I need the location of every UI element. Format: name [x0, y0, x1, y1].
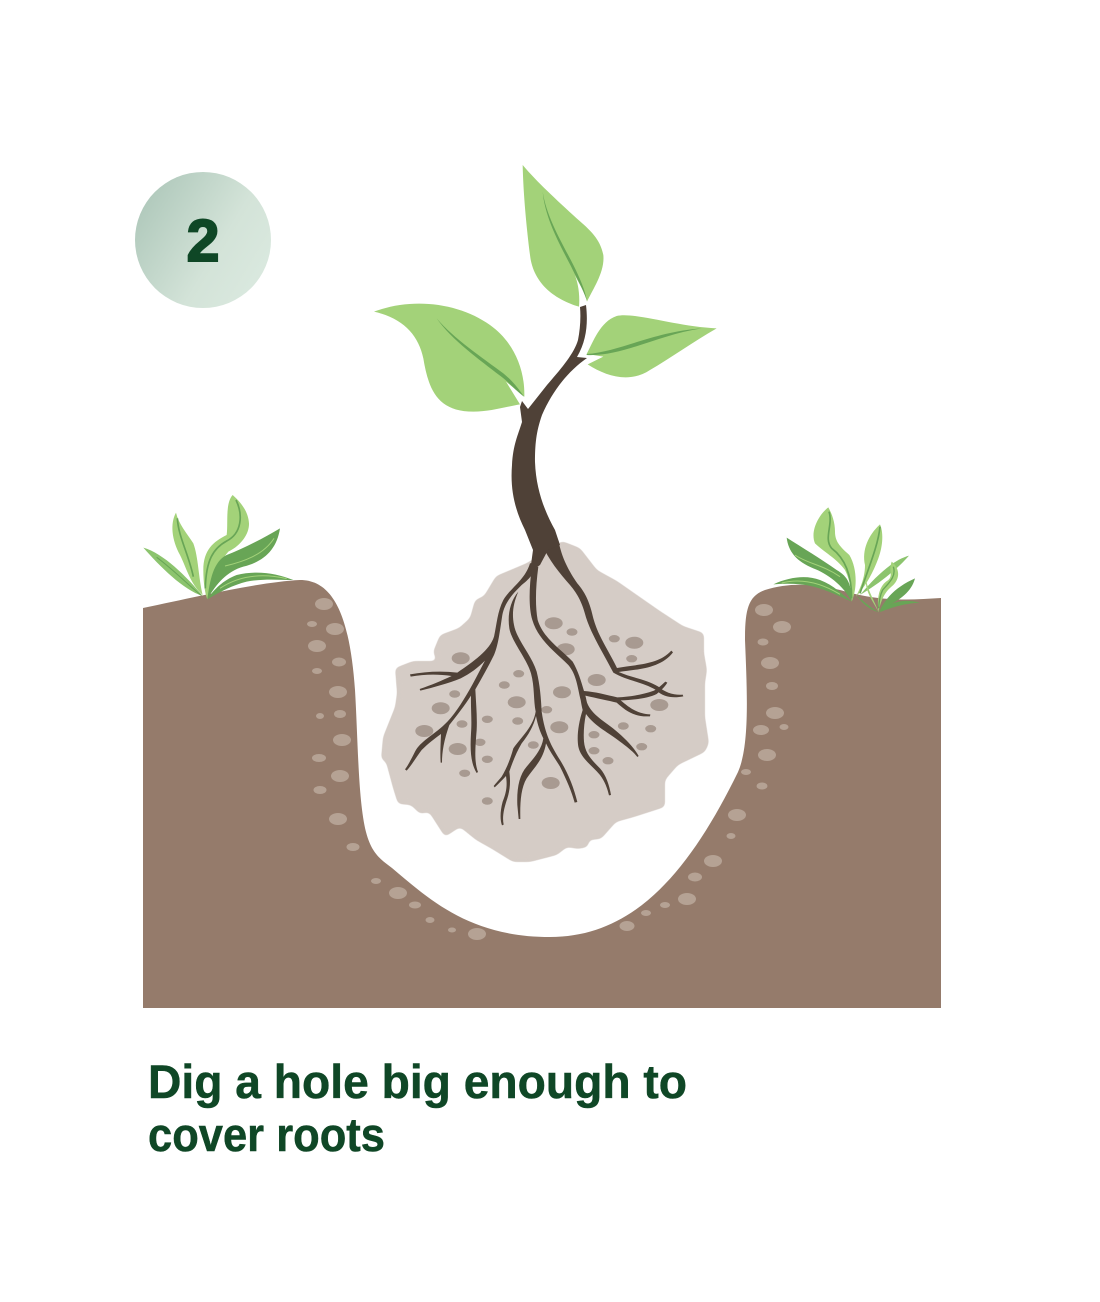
right grass tuft — [773, 507, 920, 612]
soil ground with hole — [143, 580, 941, 1008]
right leaf — [587, 315, 717, 377]
caption: Dig a hole big enough to — [148, 1055, 687, 1108]
root ball soil clod — [381, 541, 709, 862]
step number badge: 2 — [187, 208, 219, 274]
soil speckles — [307, 598, 791, 940]
left leaf — [374, 304, 524, 412]
seedling leaves — [374, 165, 717, 412]
left grass tuft — [143, 495, 293, 599]
caption: cover roots — [148, 1108, 385, 1161]
top leaf — [523, 165, 603, 307]
root: far right — [542, 540, 683, 697]
root: centre right — [530, 567, 667, 795]
clod stones — [415, 617, 668, 805]
caption — [148, 1055, 687, 1161]
root: centre left — [494, 592, 577, 825]
root: far left — [405, 562, 538, 773]
trunk — [512, 305, 587, 572]
step number badge — [135, 172, 271, 308]
roots — [405, 540, 683, 825]
